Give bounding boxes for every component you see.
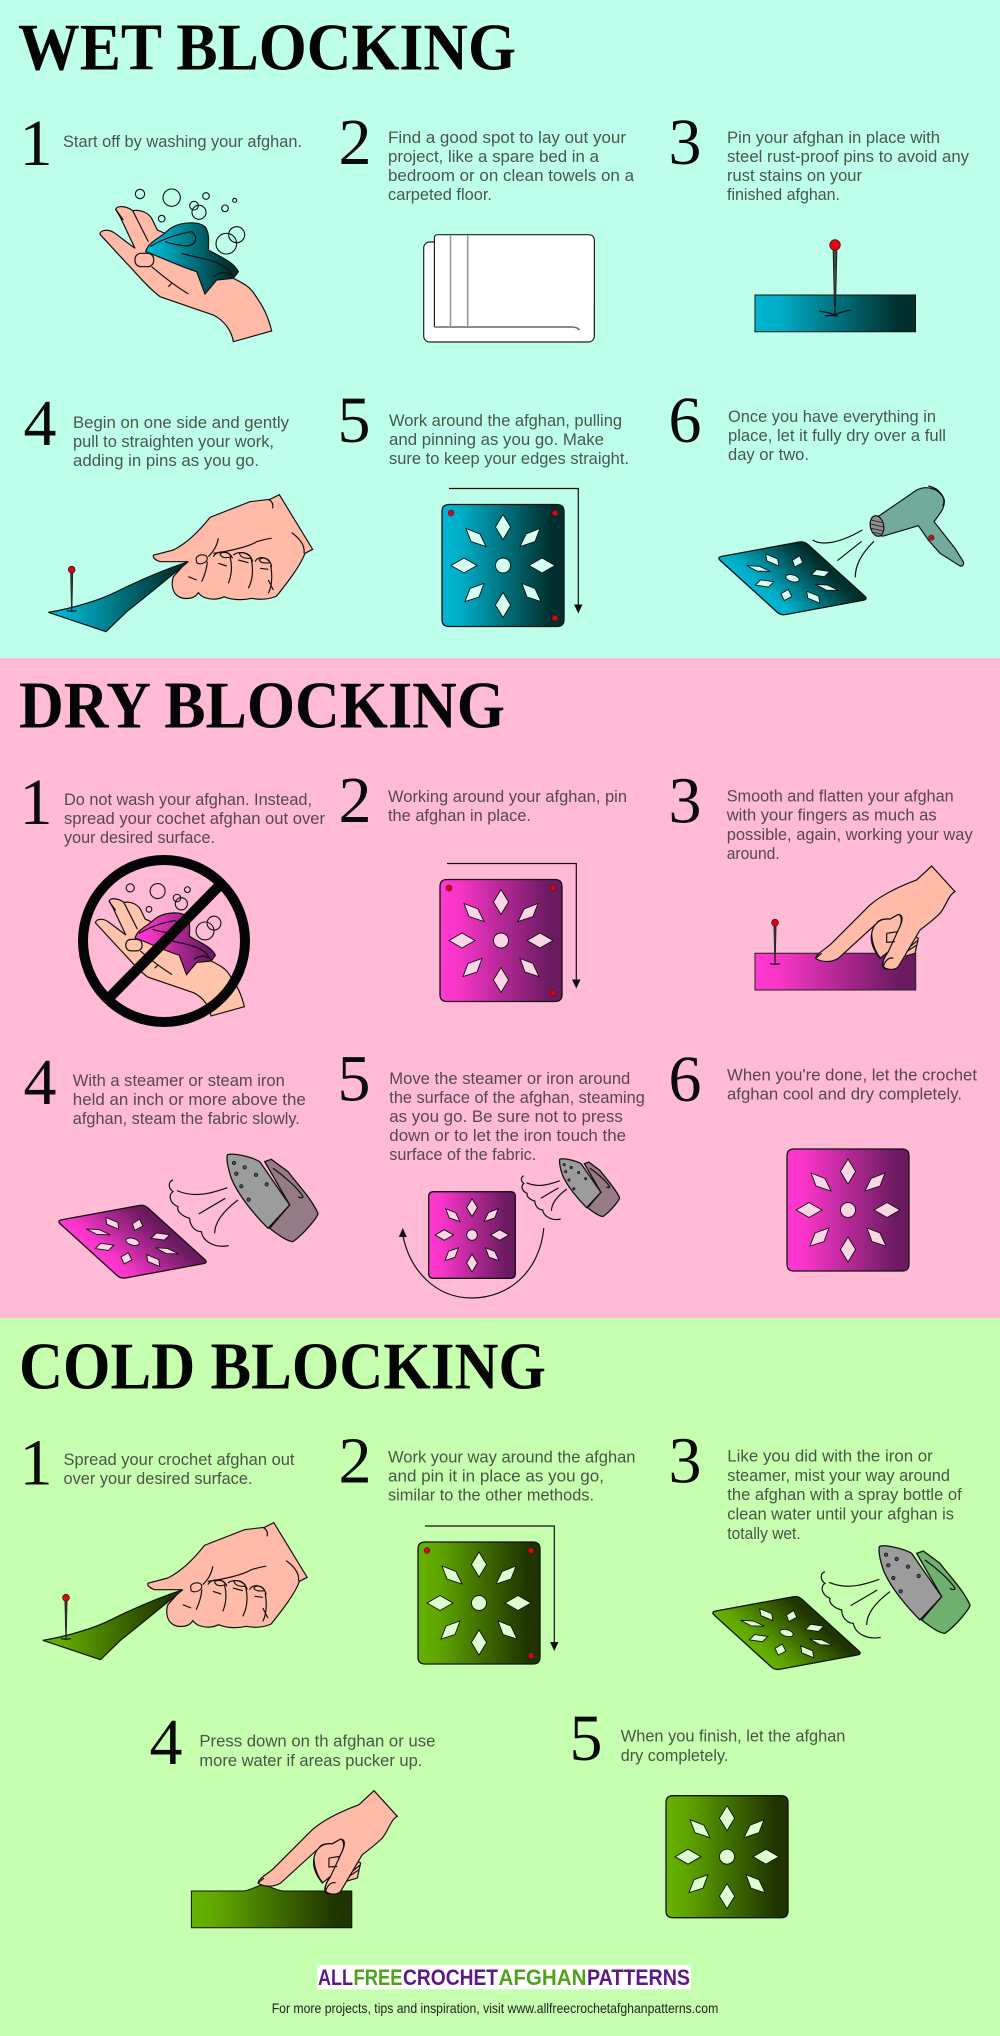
step 3: pin in place: finished afghan. xyxy=(727,185,840,204)
step 3: mist xyxy=(668,1424,970,1670)
step 5: dry xyxy=(570,1702,845,1918)
icon: pinned afghan with arrow xyxy=(442,488,582,626)
step 3: mist: the afghan with a spray bottle of xyxy=(727,1485,962,1504)
step 4: straighten: pull to straighten your work, xyxy=(73,432,274,451)
icon: folded towels xyxy=(424,235,594,342)
step 2: find a spot xyxy=(338,106,635,342)
step 2: pin: similar to the other methods. xyxy=(388,1486,594,1504)
icon: finger pressing fabric xyxy=(191,1791,397,1928)
step 1: spread: over your desired surface. xyxy=(64,1469,252,1488)
icon: hand pulling afghan xyxy=(48,495,313,632)
step 3: smooth: 3 xyxy=(668,764,702,837)
step 3: smooth: Smooth and flatten your afghan xyxy=(727,787,954,806)
step 3: smooth: with your fingers as much as xyxy=(726,806,937,825)
step 1: wash the afghan: Start off by washing your afghan. xyxy=(63,132,302,151)
step 4: steam: With a steamer or steam iron xyxy=(73,1071,285,1090)
step 3: mist: totally wet. xyxy=(727,1524,801,1543)
step 1: do not wash: 1 xyxy=(20,766,52,839)
step 4: press down: 4 xyxy=(150,1706,182,1779)
step 4: straighten: adding in pins as you go. xyxy=(73,451,259,470)
step 5: dry: When you finish, let the afghan xyxy=(621,1727,845,1746)
step 3: pin in place xyxy=(668,106,969,332)
icon: pinned afghan with arrow xyxy=(418,1526,558,1664)
step 2: pin: 2 xyxy=(338,1424,372,1497)
step 6: cool: afghan cool and dry completely. xyxy=(727,1084,962,1104)
step 6: cool: 6 xyxy=(668,1043,702,1116)
step 5: move steamer: as you go. Be sure not to press xyxy=(389,1107,623,1126)
step 2: find a spot: 2 xyxy=(338,106,372,179)
step 3: mist: steamer, mist your way around xyxy=(727,1466,950,1485)
step 6: dry: Once you have everything in xyxy=(728,407,936,426)
step 5: work around: and pinning as you go. Make xyxy=(389,430,604,449)
step 5: move steamer: Move the steamer or iron around xyxy=(389,1069,630,1088)
step 1: spread: 1 xyxy=(20,1426,52,1499)
panel: wet blocking xyxy=(0,0,1000,658)
step 4: straighten xyxy=(24,387,313,632)
step 2: find a spot: bedroom or on clean towels on a xyxy=(388,166,635,185)
heading: cold blocking: COLD BLOCKING xyxy=(19,1329,546,1403)
step 1: spread xyxy=(20,1426,307,1660)
step 2: pin around xyxy=(338,764,627,1002)
step 5: work around: sure to keep your edges straight. xyxy=(389,449,629,468)
step 2: pin xyxy=(338,1424,636,1664)
panel: cold blocking xyxy=(0,1318,1000,2036)
icon: finished afghan xyxy=(666,1796,788,1918)
step 5: dry: 5 xyxy=(570,1702,602,1775)
step 5: move steamer: down or to let the iron touch the xyxy=(389,1126,626,1145)
step 6: cool: When you're done, let the crochet xyxy=(727,1066,977,1084)
step 6: dry: place, let it fully dry over a full xyxy=(728,426,946,445)
icon: no washing sign xyxy=(83,860,245,1022)
step 2: find a spot: Find a good spot to lay out your xyxy=(388,128,626,147)
step 2: pin around: 2 xyxy=(338,764,372,837)
icon: afghan in perspective xyxy=(57,1205,208,1279)
icon: afghan with circular arrow xyxy=(399,1192,544,1298)
step 5: move steamer: surface of the fabric. xyxy=(389,1145,536,1164)
panel: dry blocking xyxy=(0,658,1000,1318)
icon: fingers smoothing fabric xyxy=(755,866,955,990)
step 2: pin around: the afghan in place. xyxy=(388,806,531,825)
step 4: steam xyxy=(24,1046,318,1279)
icon: pin xyxy=(61,1594,71,1640)
logo: allfreecrochetafghanpatterns: FREE xyxy=(354,1965,402,1990)
step 2: find a spot: project, like a spare bed in a xyxy=(388,147,600,166)
footer tagline: For more projects, tips and inspiration, visit www.allfreecrochetafghanpatterns.com xyxy=(272,2000,718,2016)
icon: hand washing afghan xyxy=(100,189,272,342)
heading: dry blocking: DRY BLOCKING xyxy=(19,669,505,743)
step 2: pin: Work your way around the afghan xyxy=(388,1447,636,1466)
step 3: mist: Like you did with the iron or xyxy=(727,1447,933,1466)
step 1: do not wash: your desired surface. xyxy=(64,828,215,847)
step 2: pin: and pin it in place as you go, xyxy=(388,1466,604,1486)
step 3: pin in place: Pin your afghan in place with xyxy=(727,128,940,147)
step 6: cool xyxy=(668,1043,977,1271)
step 4: press down: more water if areas pucker up. xyxy=(199,1751,422,1770)
step 3: pin in place: rust stains on your xyxy=(727,166,862,185)
step 3: pin in place: steel rust-proof pins to avoid any xyxy=(727,147,969,166)
icon: steam iron xyxy=(169,1154,318,1246)
step 3: smooth xyxy=(668,764,973,990)
step 4: press down: Press down on th afghan or use xyxy=(199,1732,435,1751)
step 3: smooth: around. xyxy=(727,844,780,863)
step 3: pin in place: 3 xyxy=(668,106,702,179)
icon: afghan in perspective xyxy=(717,541,868,615)
icon: hair dryer xyxy=(813,486,963,577)
step 4: straighten: 4 xyxy=(24,387,56,460)
icon: afghan in perspective xyxy=(711,1596,862,1670)
step 1: wash the afghan xyxy=(20,107,302,342)
step 4: steam: 4 xyxy=(24,1046,56,1119)
logo: allfreecrochetafghanpatterns xyxy=(317,1965,691,1990)
logo: allfreecrochetafghanpatterns: AFGHAN xyxy=(498,1965,586,1990)
step 3: smooth: possible, again, working your way xyxy=(727,825,973,844)
step 1: do not wash: Do not wash your afghan. Instead, xyxy=(64,790,312,809)
step 5: move steamer: the surface of the afghan, steaming xyxy=(389,1088,645,1107)
step 4: press down xyxy=(150,1706,435,1928)
icon: iron with mist xyxy=(821,1546,970,1638)
step 5: dry: dry completely. xyxy=(621,1746,728,1765)
step 2: pin around: Working around your afghan, pin xyxy=(388,787,627,806)
icon: pinned fabric xyxy=(755,240,916,332)
step 1: do not wash: spread your cochet afghan out over xyxy=(64,809,325,828)
logo: allfreecrochetafghanpatterns: PATTERNS xyxy=(587,1965,690,1990)
step 4: steam: held an inch or more above the xyxy=(73,1090,306,1109)
icon: finished afghan xyxy=(787,1149,909,1271)
step 5: work around: Work around the afghan, pulling xyxy=(389,411,622,430)
step 6: dry: 6 xyxy=(668,384,702,457)
step 5: work around: 5 xyxy=(338,384,370,457)
icon: hand pulling afghan xyxy=(43,1523,307,1660)
step 5: work around xyxy=(338,384,629,626)
heading: wet blocking: WET BLOCKING xyxy=(18,10,516,84)
icon: pin xyxy=(67,566,77,612)
logo: allfreecrochetafghanpatterns: ALL xyxy=(318,1965,353,1990)
step 2: find a spot: carpeted floor. xyxy=(388,185,492,204)
step 5: move steamer xyxy=(338,1043,645,1298)
step 6: dry xyxy=(668,384,963,615)
step 3: mist: clean water until your afghan is xyxy=(727,1504,954,1524)
step 5: move steamer: 5 xyxy=(338,1043,370,1116)
icon: pinned afghan with arrow xyxy=(440,864,580,1002)
step 1: wash the afghan: 1 xyxy=(20,107,52,180)
icon: small steam iron xyxy=(521,1159,620,1220)
step 3: mist: 3 xyxy=(668,1424,702,1497)
logo: allfreecrochetafghanpatterns: CROCHET xyxy=(403,1965,498,1990)
step 1: spread: Spread your crochet afghan out xyxy=(64,1450,295,1469)
step 1: do not wash xyxy=(20,766,325,1022)
step 4: steam: afghan, steam the fabric slowly. xyxy=(73,1109,300,1128)
step 6: dry: day or two. xyxy=(728,445,809,464)
step 4: straighten: Begin on one side and gently xyxy=(73,413,289,432)
